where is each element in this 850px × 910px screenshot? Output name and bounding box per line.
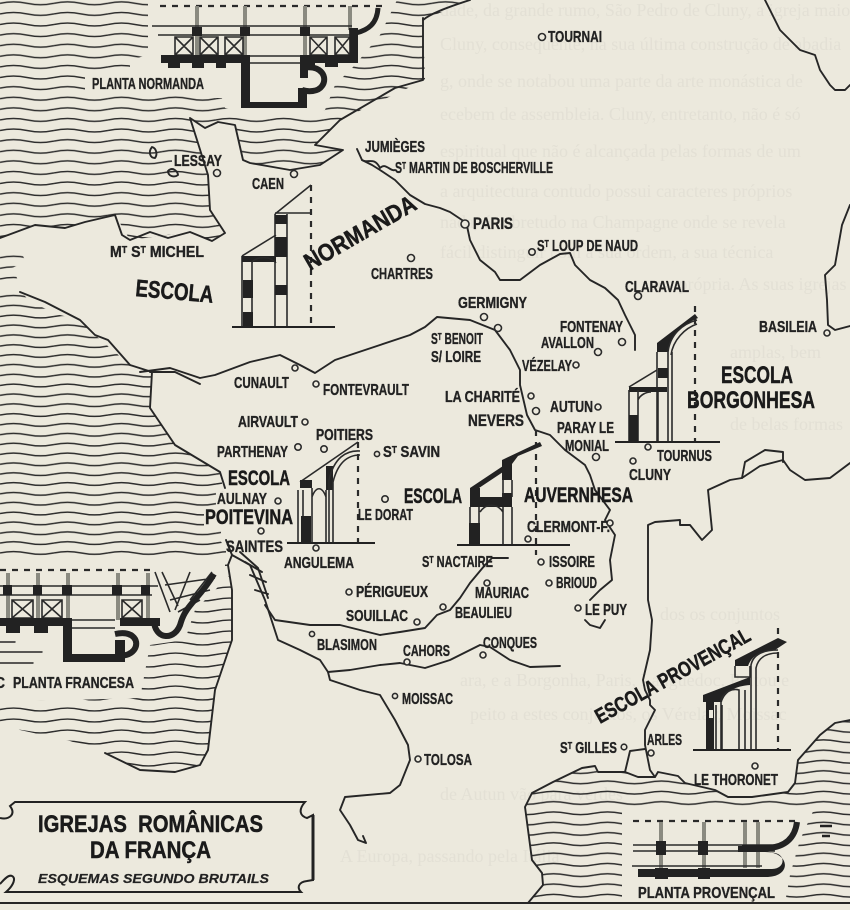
- place names: SAINTES: [226, 537, 283, 556]
- place names: PLANTA FRANCESA: [13, 675, 134, 692]
- show-through text from reverse page: amplas, bem: [730, 342, 821, 362]
- show-through text from reverse page: a arquitectura contudo possui caracteres próprios: [440, 181, 792, 201]
- place names: MARTIN DE BOSCHERVILLE: [406, 160, 553, 177]
- place names: S: [422, 554, 433, 571]
- place names: MOISSAC: [402, 691, 453, 708]
- place names: CLARAVAL: [625, 279, 689, 296]
- place names: S: [560, 740, 571, 757]
- place names: AUTUN: [550, 399, 593, 416]
- place names: T: [122, 245, 127, 256]
- place names: BLASIMON: [317, 637, 377, 654]
- sea: Atlantic north: [0, 290, 230, 556]
- school names: AUVERNHESA: [524, 484, 633, 507]
- show-through text from reverse page: de belas formas: [730, 414, 843, 434]
- place names: ANGULEMA: [284, 555, 354, 572]
- school names: ESCOLA: [404, 485, 462, 508]
- place names: BENOIT: [442, 331, 483, 348]
- place names: MICHEL: [146, 244, 204, 261]
- blank behind the Lessay label: [172, 155, 210, 168]
- floor plan: Planta Provençal: [632, 821, 832, 879]
- show-through text from reverse page: dos os conjuntos: [660, 604, 780, 624]
- place names: S: [383, 444, 394, 461]
- title cartouche: [0, 802, 313, 892]
- church section: Escola Poitevina: [287, 442, 375, 543]
- place names: LESSAY: [174, 153, 222, 170]
- show-through text from reverse page: sua própria. As suas igrejas: [650, 274, 846, 294]
- place names: T: [438, 332, 442, 343]
- place names: CAEN: [252, 176, 284, 193]
- place names: PARAY LE: [557, 420, 614, 437]
- place names: T: [429, 555, 434, 566]
- place names: CHARTRES: [371, 266, 433, 283]
- place names: LOUP DE NAUD: [549, 238, 638, 255]
- place names: MAURIAC: [475, 585, 529, 602]
- title cartouche: ESQUEMAS SEGUNDO BRUTAILS: [38, 871, 269, 886]
- sea: Atlantic south: [0, 556, 232, 772]
- show-through text from reverse page: [340, 0, 850, 866]
- school names: ESCOLA PROVENÇAL: [591, 624, 755, 728]
- place names: BEAULIEU: [455, 605, 512, 622]
- place names: CLERMONT-F.: [527, 519, 610, 536]
- place names: JUMIÈGES: [365, 137, 425, 156]
- place names: SAVIN: [397, 444, 440, 461]
- church section: Escola Borgonhesa: [615, 306, 720, 442]
- place names: TOURNUS: [657, 448, 712, 465]
- place names: S: [395, 160, 406, 177]
- place names: NACTAIRE: [434, 554, 493, 571]
- place names: LA CHARITÉ: [445, 387, 520, 406]
- show-through text from reverse page: fácil distinguir com a sua ordem, a sua técnica: [440, 242, 773, 262]
- show-through text from reverse page: g, onde se notabou uma parte da arte monástica de: [440, 71, 803, 91]
- place names: CLUNY: [629, 467, 671, 484]
- place names: BASILEIA: [759, 319, 817, 336]
- place names: S/ LOIRE: [431, 349, 481, 366]
- place names: FONTENAY: [560, 319, 623, 336]
- sea: small Brittany bays: [0, 250, 26, 284]
- floor plan: Planta Normanda: [152, 6, 385, 108]
- place names: S: [431, 331, 442, 348]
- school names: ESCOLA: [134, 275, 215, 309]
- place names: T: [141, 245, 146, 256]
- blank area of the Provençal plan: [622, 807, 815, 903]
- school names: ESCOLA: [721, 362, 793, 389]
- show-through text from reverse page: peito a estes conjuntos, os Vérelay, Moissac: [470, 704, 786, 724]
- place names: SOUILLAC: [346, 608, 408, 625]
- show-through text from reverse page: Cluny, consequente, na sua última construção de abadia: [440, 34, 841, 54]
- place names: NEVERS: [468, 411, 524, 430]
- place names: GILLES: [572, 740, 617, 757]
- school names: POITEVINA: [205, 506, 293, 529]
- school names: [134, 190, 815, 728]
- school names: ESCOLA: [228, 467, 290, 490]
- sea: Mediterranean: [525, 720, 850, 903]
- place names: AULNAY: [217, 491, 267, 508]
- place names: S: [127, 244, 141, 261]
- show-through text from reverse page: espiritual que não é alcançada pelas formas de um: [440, 141, 801, 161]
- show-through text from reverse page: de Autun vão para verdes: [440, 784, 623, 804]
- place names: LE PUY: [585, 602, 627, 619]
- school names: NORMANDA: [300, 190, 421, 276]
- blank area of the Norman plan: [85, 0, 397, 117]
- place names: CAHORS: [403, 643, 450, 660]
- place names: VÉZELAY: [522, 356, 572, 375]
- blank area of the French plan: [0, 556, 230, 702]
- show-through text from reverse page: A Europa, passando pela Itália: [340, 846, 559, 866]
- place names: POITIERS: [316, 427, 373, 444]
- place names: PLANTA NORMANDA: [92, 76, 204, 93]
- floor plan: Planta Francesa: [0, 570, 215, 692]
- place names: MONIAL: [565, 438, 609, 455]
- church section: Escola Auvernhesa: [457, 430, 570, 555]
- title cartouche: DA FRANÇA: [90, 837, 211, 864]
- place names: PARIS: [473, 214, 513, 233]
- place markers: [214, 34, 830, 769]
- place names: T: [568, 741, 572, 752]
- place names: TOLOSA: [424, 752, 472, 769]
- show-through text from reverse page: dade, da grande rumo, São Pedro de Cluny, a igreja maior: [440, 0, 850, 20]
- place names: PÉRIGUEUX: [356, 582, 428, 601]
- place names: GERMIGNY: [458, 295, 527, 312]
- place names: T: [392, 445, 397, 456]
- place names: T: [402, 161, 406, 172]
- place names: S: [537, 238, 548, 255]
- church section: Escola Provençal: [693, 628, 791, 750]
- place names: PLANTA PROVENÇAL: [638, 885, 775, 902]
- place names: T: [545, 239, 549, 250]
- place names: M: [110, 244, 123, 261]
- place names: CUNAULT: [234, 375, 289, 392]
- place names: LE THORONET: [694, 772, 778, 789]
- place names: ISSOIRE: [549, 554, 595, 571]
- place names: ARLES: [647, 732, 682, 749]
- place names: CONQUES: [483, 635, 537, 652]
- title cartouche: IGREJAS ROMÂNICAS: [38, 810, 263, 838]
- place names: LE DORAT: [358, 507, 413, 524]
- place names: AVALLON: [541, 335, 594, 352]
- sea: English Channel: [0, 0, 470, 241]
- church section: Escola Normanda: [232, 185, 335, 327]
- place names: TOURNAI: [548, 29, 602, 46]
- show-through text from reverse page: ara, e a Borgonha, Paris, Languedoc, Poitou e: [460, 670, 789, 690]
- show-through text from reverse page: nada, é sobretudo na Champagne onde se revela: [440, 212, 786, 232]
- place names: BRIOUD: [556, 575, 597, 592]
- place names: AIRVAULT: [238, 414, 298, 431]
- show-through text from reverse page: ecebem de assembleia. Cluny, entretanto, não é só: [440, 104, 801, 124]
- place names: PARTHENAY: [217, 444, 288, 461]
- place names: FONTEVRAULT: [323, 382, 409, 399]
- blank behind the Poitevina labels: [204, 470, 232, 556]
